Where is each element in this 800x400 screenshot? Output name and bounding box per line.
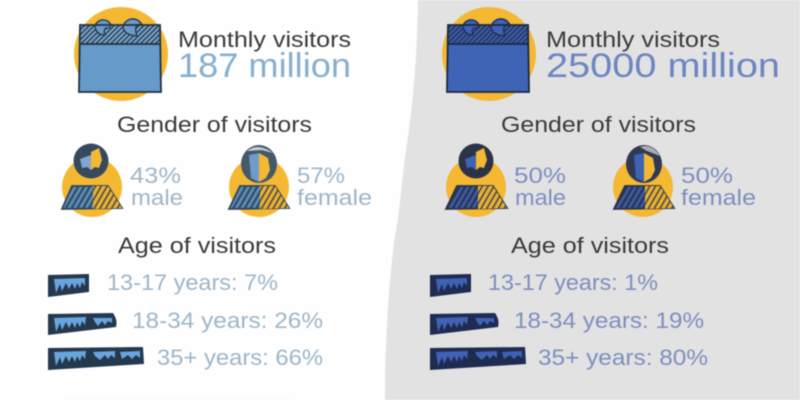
- stat: 43% male: 43%: [130, 163, 181, 188]
- stat: 50% male: [514, 163, 566, 210]
- icon: female visitor: [229, 145, 289, 217]
- heading: age of visitors: Age of visitors: [511, 233, 669, 258]
- heading: monthly visitors: Monthly visitors: [546, 27, 720, 52]
- panel: left site: [48, 7, 372, 400]
- stat: 57% female: female: [297, 185, 372, 210]
- stat: 50% male: male: [515, 185, 566, 210]
- label: 13-17 years: 13-17 years: 7%: [107, 270, 278, 295]
- panel: right site: [430, 7, 780, 370]
- icon: bar 18-34: [430, 313, 499, 335]
- heading: monthly visitors: Monthly visitors: [178, 27, 351, 52]
- heading: gender of visitors: Gender of visitors: [501, 112, 696, 137]
- heading: gender of visitors: Gender of visitors: [117, 112, 312, 137]
- number: 25000 million: 25000 million: [546, 47, 780, 85]
- faint cropped text at bottom edge: [65, 396, 290, 400]
- label: 35+ years: 35+ years: 80%: [538, 345, 708, 370]
- stat: 43% male: male: [131, 185, 183, 210]
- icon: bar 13-17: [430, 274, 471, 297]
- icon: female visitor: [613, 145, 674, 217]
- icon: male visitor: [62, 144, 122, 217]
- icon: bar 13-17: [48, 274, 89, 297]
- icon: calendar: [74, 7, 168, 101]
- label: 35+ years: 35+ years: 66%: [157, 345, 323, 370]
- number: 187 million: 187 million: [178, 47, 351, 85]
- icon: calendar: [442, 7, 536, 101]
- stat: 50% female: [681, 163, 756, 210]
- panel: right grey background: [385, 0, 800, 400]
- label: 18-34 years: 18-34 years: 26%: [132, 308, 323, 333]
- icon: bar 35+: [48, 347, 144, 370]
- stat: 57% female: 57%: [297, 163, 345, 188]
- icon: male visitor: [446, 144, 507, 217]
- stat: 50% female: 50%: [681, 163, 733, 188]
- icon: bar 35+: [430, 347, 526, 370]
- icon: bar 18-34: [48, 313, 117, 335]
- stat: 57% female: [297, 163, 372, 210]
- stat: 50% female: female: [681, 185, 756, 210]
- stat: 43% male: [130, 163, 183, 210]
- stat: 50% male: 50%: [514, 163, 566, 188]
- label: 18-34 years: 18-34 years: 19%: [514, 308, 704, 333]
- heading: age of visitors: Age of visitors: [118, 233, 276, 258]
- label: 13-17 years: 13-17 years: 1%: [488, 270, 658, 295]
